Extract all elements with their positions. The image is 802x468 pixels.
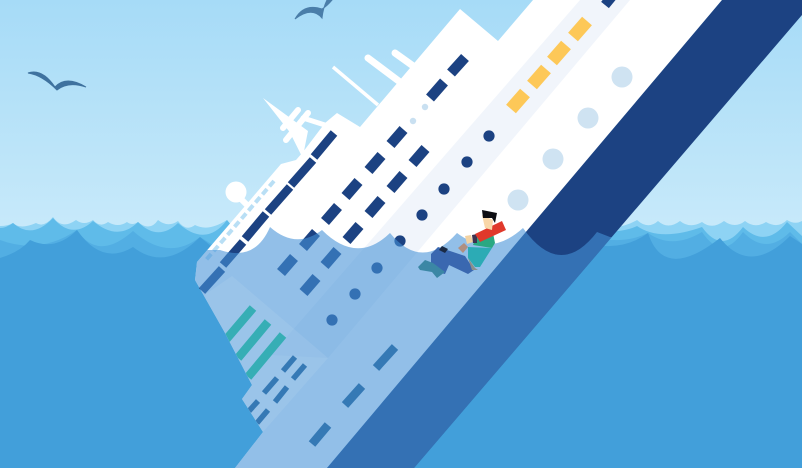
ship off-white deck band	[271, 0, 630, 358]
person lower leg and shoes	[418, 260, 445, 278]
sea: back waves right	[400, 220, 802, 468]
submerged lower windows	[312, 347, 395, 444]
sea: front wave right	[400, 233, 802, 468]
person legs	[431, 247, 474, 274]
bird: top	[295, 0, 332, 19]
ship navy hull	[327, 0, 802, 468]
ship navy portholes	[326, 130, 495, 326]
sea: back waves left	[0, 217, 260, 468]
ship yellow windows	[511, 21, 587, 109]
submerged teal windows	[224, 308, 283, 377]
ship small pale dots	[410, 104, 428, 124]
ship radar ball	[226, 182, 254, 212]
ship top corner window	[605, 0, 614, 5]
ship cabin windows	[281, 58, 465, 292]
sky background	[0, 0, 802, 240]
person hair	[482, 210, 497, 223]
person arm and hand	[458, 234, 477, 253]
person red scarf	[475, 221, 506, 242]
ship	[185, 0, 802, 468]
bird: left	[28, 72, 86, 90]
ship white superstructure	[195, 0, 722, 468]
ship railing dashes	[206, 181, 274, 260]
ship pale portholes	[508, 66, 632, 210]
water overlay on submerged ship	[185, 227, 640, 468]
person face	[482, 215, 493, 230]
person torso	[473, 233, 495, 248]
submerged small windows	[249, 357, 305, 423]
ship funnels and antennae	[333, 53, 416, 105]
sea: front wave left	[0, 230, 240, 468]
person with life scarf sliding down deck	[418, 210, 506, 278]
ship deck windows row	[202, 133, 334, 291]
ship mast	[263, 98, 328, 156]
submerged bow section	[272, 329, 326, 358]
